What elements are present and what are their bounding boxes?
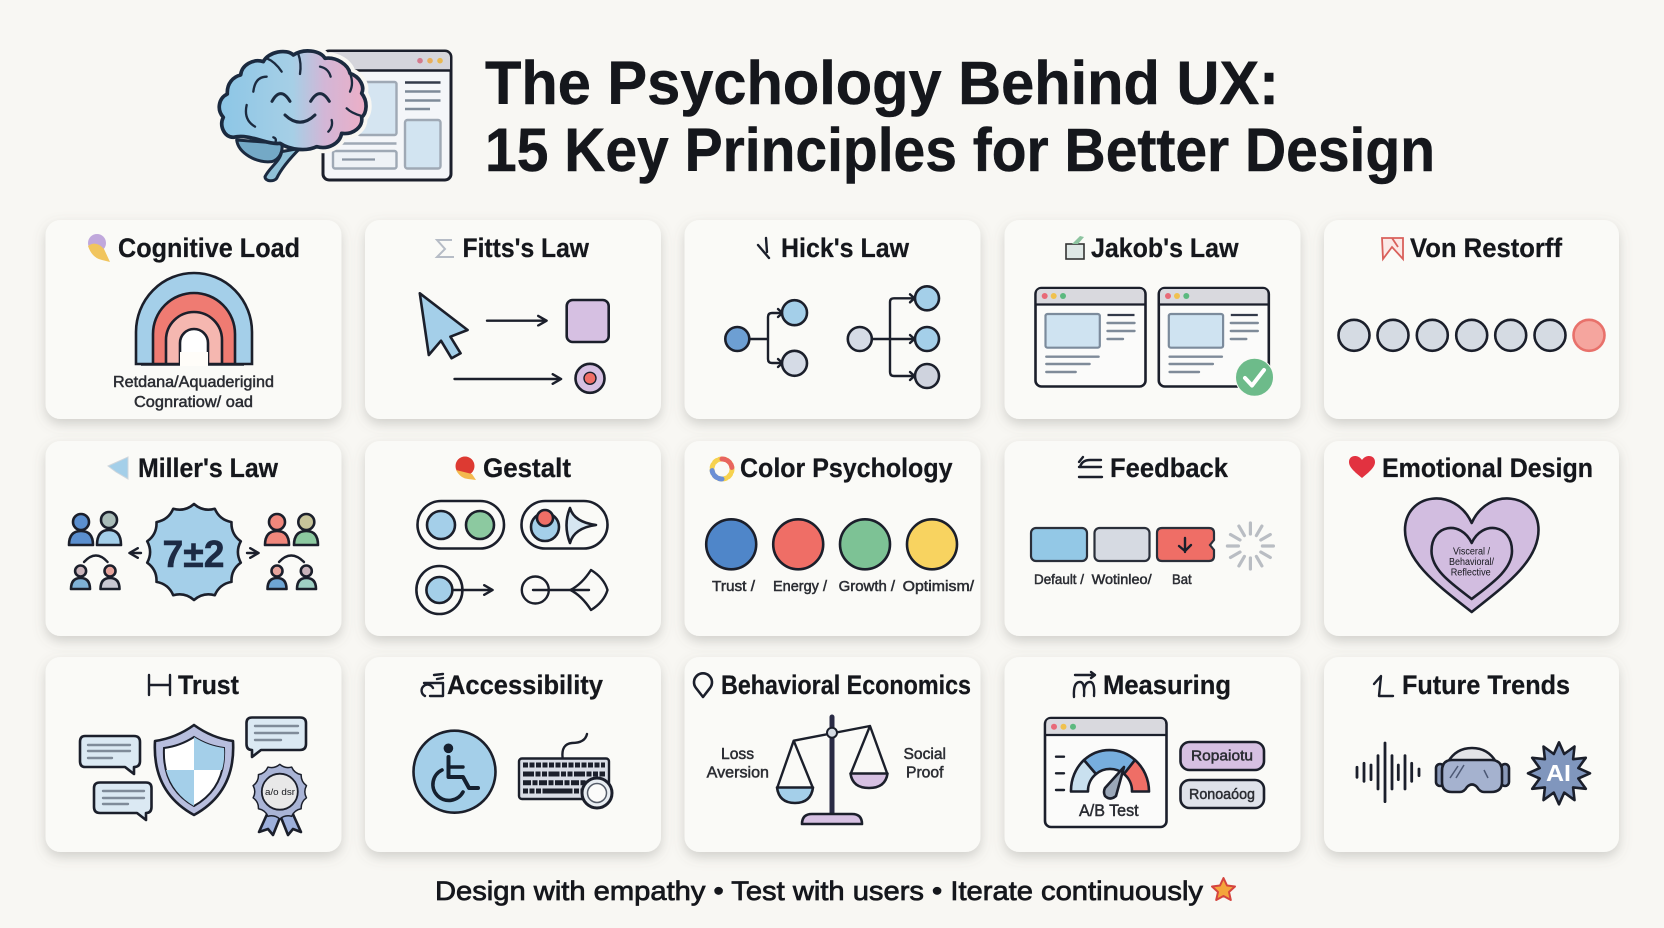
icon: balance scale (777, 717, 888, 824)
heading: Emotional Design (1382, 453, 1593, 483)
pill: metric one (1180, 742, 1264, 770)
text: loss aversion: Aversion (707, 764, 769, 781)
text: chart caption (113, 374, 274, 411)
arrow: left (130, 552, 141, 554)
pill: metric two (1180, 780, 1264, 808)
icon: VR headset (1436, 748, 1509, 792)
icon: trend glyph (1374, 676, 1393, 696)
icon: small target (576, 364, 604, 393)
panel: Future Trends (1324, 657, 1619, 852)
text: loss aversion (707, 746, 769, 781)
panel: Accessibility (365, 657, 661, 852)
icon: star (1212, 878, 1235, 900)
heading: Future Trends (1402, 670, 1570, 700)
icon: small chart glyph (1074, 672, 1095, 697)
icon: branch arrow (758, 238, 769, 258)
icon: keyboard with focus ring (519, 734, 612, 808)
people group right (265, 514, 318, 589)
shapes: proximity pill (418, 501, 504, 548)
panel: Feedback (1004, 441, 1300, 636)
swatch: optimism (907, 519, 957, 569)
icon: smiling brain (219, 51, 366, 181)
icon: megaphone (108, 457, 128, 479)
row of circles with one highlighted (1338, 320, 1604, 351)
swatch: trust (706, 519, 756, 569)
button labels: Wotinleo/ (1092, 571, 1152, 587)
nested hearts (1405, 499, 1538, 612)
icon: browser window (323, 51, 451, 180)
panel: Emotional Design (1324, 441, 1619, 636)
heading: Fitts's Law (462, 233, 590, 263)
diagram: three choices (848, 286, 939, 388)
swatch labels: Energy / (773, 578, 828, 595)
icon: bracket bar (149, 675, 170, 695)
heading: Jakob's Law (1091, 233, 1239, 263)
shapes: similarity pill (522, 501, 608, 548)
people group left (69, 512, 121, 589)
panel: Von Restorff (1324, 220, 1619, 419)
arrow: to large target (487, 320, 546, 322)
gauge (1071, 750, 1149, 798)
icon: loading spinner (1227, 523, 1273, 569)
swatch: growth (840, 519, 890, 569)
heading: Feedback (1110, 453, 1229, 483)
button: hover (1094, 528, 1150, 561)
speech bubble: left top (80, 736, 140, 774)
panel: Color Psychology (684, 441, 980, 636)
A/B test window with gauge (1045, 718, 1166, 827)
header illustration: brain and browser (219, 51, 451, 181)
badge: 7±2: 7±2 (162, 534, 224, 576)
swatch labels: Trust / (712, 578, 756, 595)
panel: Miller's Law (46, 441, 342, 636)
heading: Behavioral Economics (721, 670, 971, 700)
swatch labels: Optimism/ (903, 578, 975, 595)
panel: Hick's Law (684, 220, 980, 419)
icon: shield (155, 725, 233, 815)
icon: browser one (1036, 288, 1146, 386)
panel: Behavioral Economics (684, 657, 980, 852)
swatch labels (712, 578, 975, 595)
icon: red blob (456, 456, 476, 480)
text: three levels (1449, 546, 1494, 578)
panel: Gestalt (365, 441, 661, 636)
icon: document (1066, 236, 1084, 259)
chart: concentric load arches (136, 273, 252, 366)
badge: 7±2 (147, 504, 241, 600)
icon: wheelchair symbol (414, 731, 496, 813)
text: social proof (904, 746, 946, 781)
icon: AI star badge: AI (1546, 760, 1571, 786)
icon: cursor (420, 293, 468, 358)
title: 15 Key Principles for Better Design (485, 116, 1435, 184)
panel: Fitts's Law (365, 220, 661, 419)
button: default (1031, 528, 1087, 561)
icon: sigma (437, 240, 454, 257)
button labels: Bat (1172, 571, 1192, 587)
icon: browser two (1159, 288, 1269, 386)
icon: exchange arrows (1079, 457, 1102, 477)
heading: Trust (178, 670, 239, 700)
footer tagline: Design with empathy • Test with users • Iterate continuously (435, 876, 1204, 906)
arrow: to small target (454, 378, 560, 380)
text: three levels: Reflective (1451, 567, 1491, 578)
diagram: two choices (725, 300, 807, 376)
heading: Hick's Law (781, 233, 910, 263)
shapes: circle to arrow (522, 570, 608, 610)
icon: award rosette (253, 764, 306, 835)
speech bubble: left bottom (94, 782, 152, 820)
icon: cognitive blob (88, 234, 110, 262)
title: The Psychology Behind UX: (485, 49, 1279, 117)
icon: award rosette: a/o dsr (265, 787, 295, 797)
icon: large target (567, 300, 609, 342)
icon: outlined flag (1382, 238, 1403, 259)
text: chart caption: Retdana/Aquaderigind (113, 374, 274, 391)
panel: Trust (46, 657, 342, 852)
heading: Measuring (1103, 670, 1231, 700)
title (485, 49, 1435, 184)
panel: Cognitive Load (46, 220, 342, 419)
arrow: right (247, 552, 258, 554)
panel: Jakob's Law (1004, 220, 1300, 419)
swatch labels: Growth / (839, 578, 896, 595)
pill: metric one: Ropaiotu (1191, 748, 1253, 765)
icon: voice wave (1357, 743, 1419, 802)
icon: AI star badge (1528, 742, 1590, 804)
icon: red heart (1349, 456, 1375, 478)
speech bubble: right (246, 718, 306, 757)
A/B test window with gauge: A/B Test (1079, 801, 1139, 820)
text: three levels: Behavioral/ (1449, 557, 1494, 568)
text: loss aversion: Loss (721, 746, 754, 763)
heading: Color Psychology (740, 453, 952, 483)
button labels: Default / (1034, 571, 1084, 587)
heading: Von Restorff (1410, 233, 1563, 263)
icon: colour wheel (712, 459, 732, 479)
icon: location pin (694, 673, 712, 697)
icon: small glyph (422, 674, 443, 696)
heading: Accessibility (447, 670, 603, 700)
heading: Cognitive Load (118, 233, 300, 263)
text: social proof: Proof (906, 764, 944, 781)
button: error (1157, 528, 1214, 561)
button labels (1034, 571, 1192, 587)
panel: Measuring (1004, 657, 1300, 852)
text: chart caption: Cognratiow/ oad (134, 394, 253, 411)
heading: Miller's Law (138, 453, 279, 483)
heading: Gestalt (483, 453, 571, 483)
pill: metric two: Ronoaóog (1189, 786, 1255, 803)
shapes: target with arrow (416, 566, 492, 614)
text: three levels: Visceral / (1453, 546, 1490, 557)
swatch: energy (773, 519, 823, 569)
text: social proof: Social (904, 746, 946, 763)
icon: green check (1236, 358, 1274, 396)
